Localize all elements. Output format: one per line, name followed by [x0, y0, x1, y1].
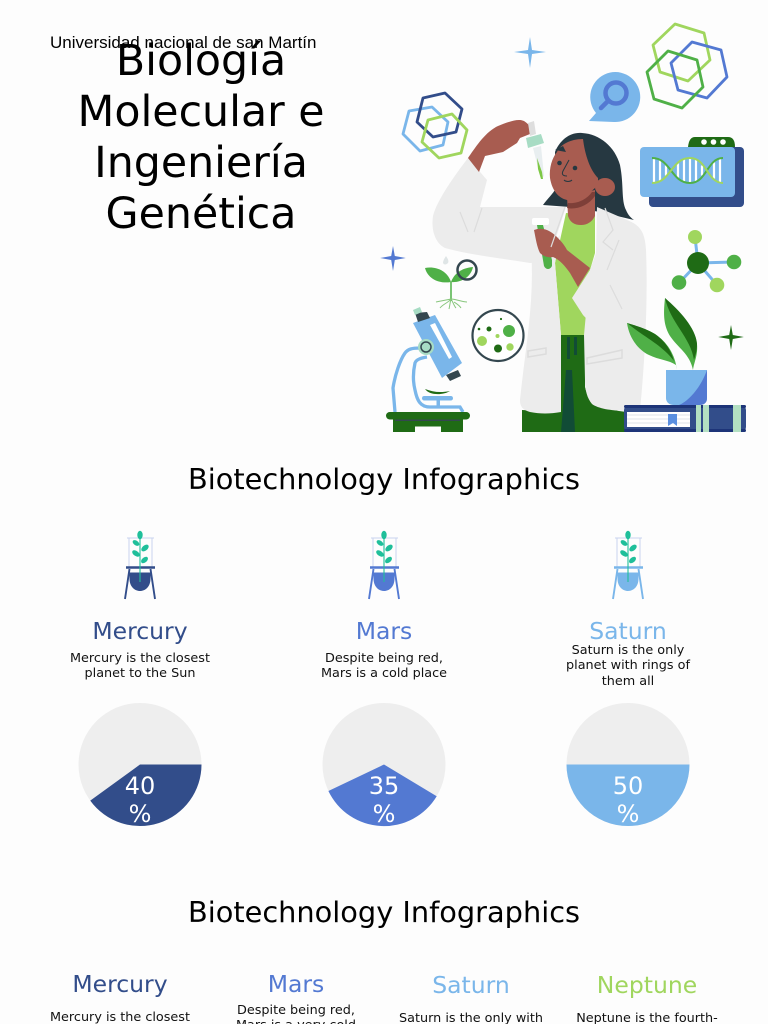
Saturn description: planet with rings of — [566, 658, 690, 673]
ear — [595, 178, 615, 196]
heading: section one: Biotechnology Infographics — [188, 462, 580, 496]
Mercury description: planet to the Sun — [85, 666, 195, 681]
icon: Saturn flask — [613, 531, 643, 599]
icon: petri dish — [472, 310, 524, 361]
icon: Mercury flask — [125, 531, 155, 599]
coat right panel — [584, 207, 647, 411]
column: Mars: Despite being red, — [237, 1003, 355, 1018]
icon: blue sparkle — [380, 246, 406, 271]
column: Saturn: Saturn — [432, 971, 510, 999]
icon: microscope — [386, 307, 470, 432]
title: Biología — [116, 36, 286, 86]
column: Neptune: Neptune — [597, 971, 697, 999]
crossed sleeve — [572, 270, 627, 345]
Mars description — [321, 651, 447, 681]
Saturn description — [566, 643, 690, 689]
face features — [557, 160, 577, 182]
pants — [522, 335, 627, 432]
Mercury description — [70, 651, 210, 681]
lower hand and forearm — [534, 229, 590, 287]
icon: search bubble — [589, 72, 640, 122]
pie chart: 40 percent — [78, 703, 202, 828]
icon: potted plant on books — [624, 298, 746, 432]
hair — [543, 133, 634, 220]
Saturn description: Saturn is the only — [572, 643, 685, 658]
icon: sprout — [425, 256, 476, 309]
coat left panel — [520, 235, 561, 414]
heading: section two: Biotechnology Infographics — [188, 895, 580, 929]
Saturn description: them all — [602, 674, 654, 689]
Saturn name: Saturn — [589, 617, 667, 645]
fringe — [555, 146, 566, 152]
title: Molecular e — [78, 87, 324, 137]
pie chart: 50 percent — [566, 703, 690, 828]
Mars description: Despite being red, — [325, 651, 443, 666]
pie chart: 35 percent: 35 — [369, 772, 399, 800]
pie chart: 50 percent: % — [617, 800, 639, 828]
icon: light blue sparkle — [514, 37, 546, 68]
icon: dark sparkle — [718, 325, 744, 350]
woman scientist — [432, 120, 647, 432]
raised arm sleeve — [432, 158, 566, 263]
pie chart: 50 percent: 50 — [613, 772, 643, 800]
neck — [567, 190, 595, 225]
Mars name: Mars — [356, 617, 412, 645]
icon: hexagons left — [403, 93, 467, 158]
shirt — [555, 213, 595, 335]
pie chart: 35 percent — [322, 703, 446, 828]
pie chart: 35 percent: % — [373, 800, 395, 828]
icon: hexagons top right — [647, 24, 727, 108]
test tube — [532, 218, 552, 269]
institution name: Universidad nacional de san Martín — [50, 33, 316, 52]
Mercury description: Mercury is the closest — [70, 651, 210, 666]
icon: molecule — [672, 230, 741, 292]
panel: Mercury — [70, 531, 210, 828]
coat details — [528, 348, 622, 364]
icon: DNA window — [640, 137, 744, 207]
icon: Mars flask — [369, 531, 399, 599]
title: Ingeniería — [94, 138, 308, 188]
hero illustration — [380, 24, 746, 432]
column: Mercury — [50, 970, 190, 1024]
Mercury name: Mercury — [92, 617, 188, 645]
column: Mars: Mars — [268, 970, 324, 998]
panel: Mars — [321, 531, 447, 828]
dropper — [526, 121, 544, 179]
raised hand — [468, 120, 535, 172]
column: Mars — [236, 970, 356, 1024]
column: Mercury: Mercury — [72, 970, 168, 998]
title — [78, 36, 324, 239]
pie chart: 40 percent: % — [129, 800, 151, 828]
panel: Saturn — [566, 531, 690, 828]
face — [550, 139, 598, 200]
column: Neptune — [576, 971, 718, 1024]
column: Saturn — [399, 971, 543, 1024]
pie chart: 40 percent: 40 — [125, 772, 155, 800]
title: Genética — [106, 189, 296, 239]
Mars description: Mars is a cold place — [321, 666, 447, 681]
